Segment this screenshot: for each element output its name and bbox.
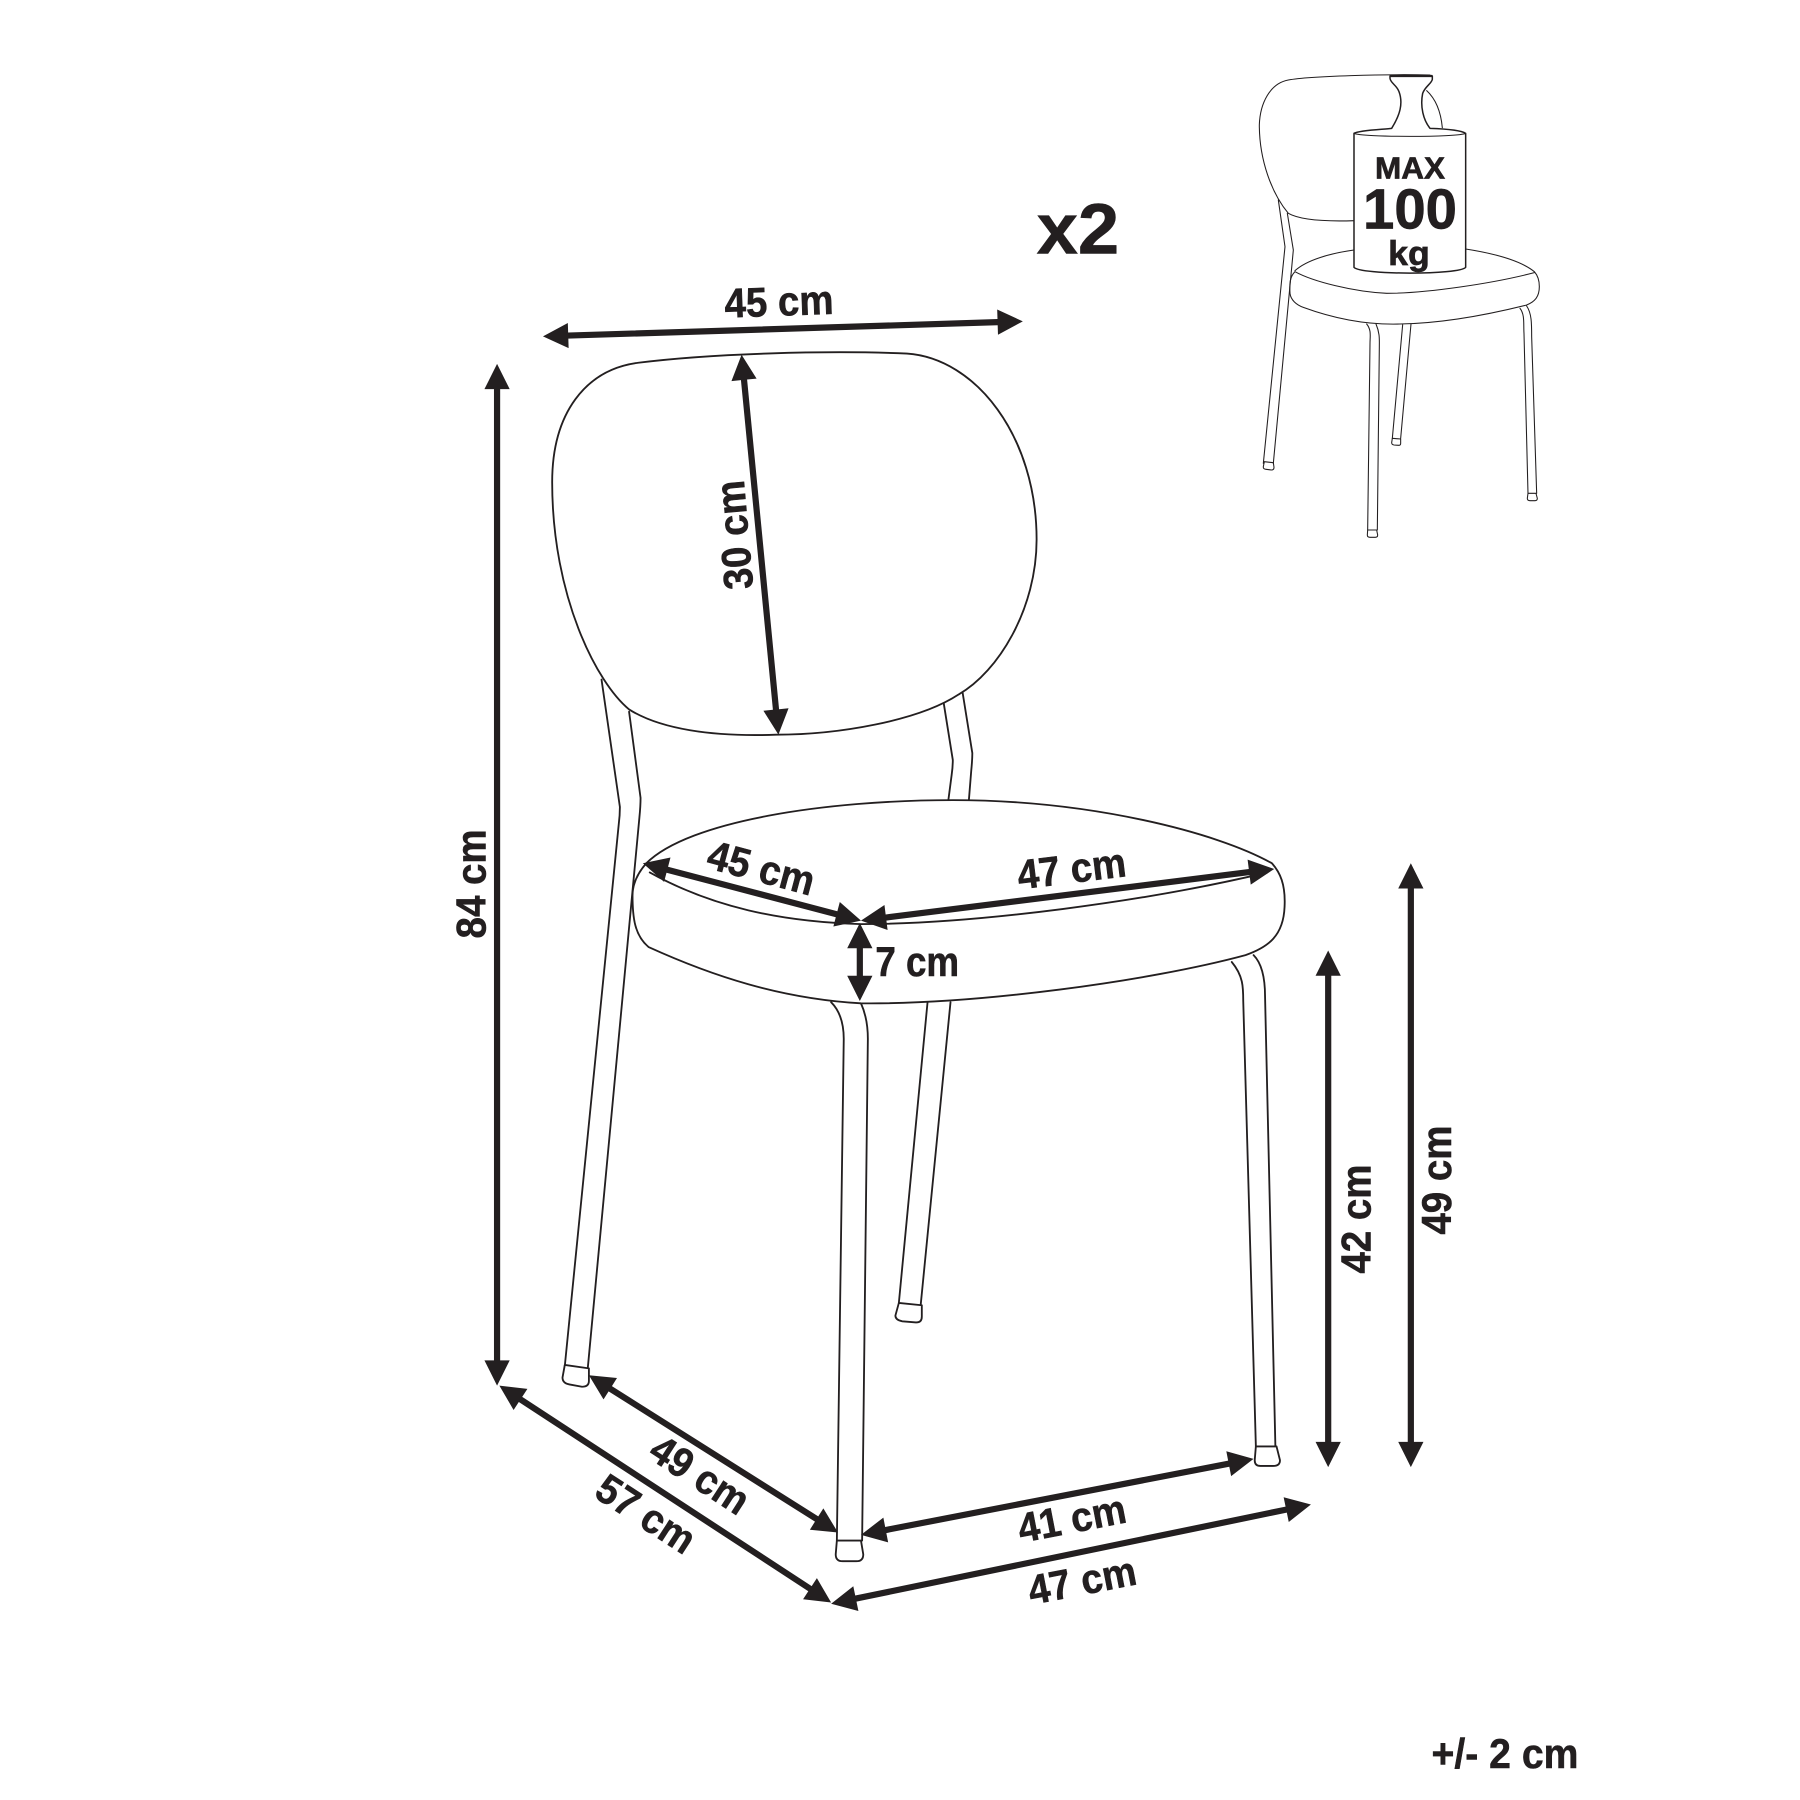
arrow: backrest height 30 cm [729, 354, 791, 736]
label: 41 cm leg width: 41 cm [1014, 1486, 1130, 1552]
arrow: seat width 47 cm [859, 856, 1276, 933]
arrow: leg width 41 cm [859, 1446, 1256, 1547]
label: 7 cm seat thickness: 7 cm [875, 939, 959, 985]
label: 49 cm leg depth: 49 cm [642, 1426, 758, 1524]
inset: chair with 100 kg max load [1259, 75, 1539, 537]
label: 47 cm overall width: 47 cm [1024, 1548, 1140, 1614]
inset weight [1354, 76, 1466, 273]
label: 49 cm seat height: 49 cm [1414, 1126, 1460, 1235]
chair backrest [552, 352, 1037, 735]
arrow: total height 84 cm [484, 364, 510, 1386]
label: 45 cm seat depth: 45 cm [703, 832, 820, 904]
arrow: leg depth 49 cm [582, 1365, 845, 1543]
arrow: overall width 47 cm [829, 1492, 1313, 1616]
label: 57 cm overall depth: 57 cm [588, 1465, 704, 1563]
inset text: MAX: MAX [1375, 151, 1446, 185]
arrow: backrest width 45 cm [543, 309, 1023, 349]
inset text: 100: 100 [1363, 178, 1457, 241]
label: 45 cm backrest width: 45 cm [724, 277, 834, 327]
chair left rear post and leg [562, 680, 641, 1387]
arrow: seat depth 45 cm [640, 851, 864, 933]
inset chair outline [1259, 75, 1539, 537]
chair seat cushion [633, 800, 1285, 1003]
label: 30 cm backrest height: 30 cm [707, 479, 762, 591]
label: 47 cm seat width: 47 cm [1015, 839, 1129, 898]
inset text: kg: kg [1388, 235, 1430, 273]
arrow: seat height 49 cm [1398, 863, 1423, 1467]
chair front-left leg [831, 1002, 868, 1561]
arrow: under-seat height 42 cm [1316, 951, 1341, 1467]
tolerance note: +/- 2 cm [1432, 1731, 1578, 1777]
arrow: seat thickness 7 cm [847, 923, 872, 1001]
label: 42 cm under-seat height: 42 cm [1334, 1165, 1380, 1274]
chair right rear post [944, 689, 972, 801]
label: 84 cm total height: 84 cm [449, 829, 495, 938]
chair back-right leg [895, 1002, 951, 1322]
main chair line drawing [552, 352, 1285, 1561]
chair front-right leg [1232, 955, 1280, 1466]
quantity label x2: x2 [1037, 191, 1119, 270]
arrow: overall depth 57 cm [492, 1375, 838, 1613]
